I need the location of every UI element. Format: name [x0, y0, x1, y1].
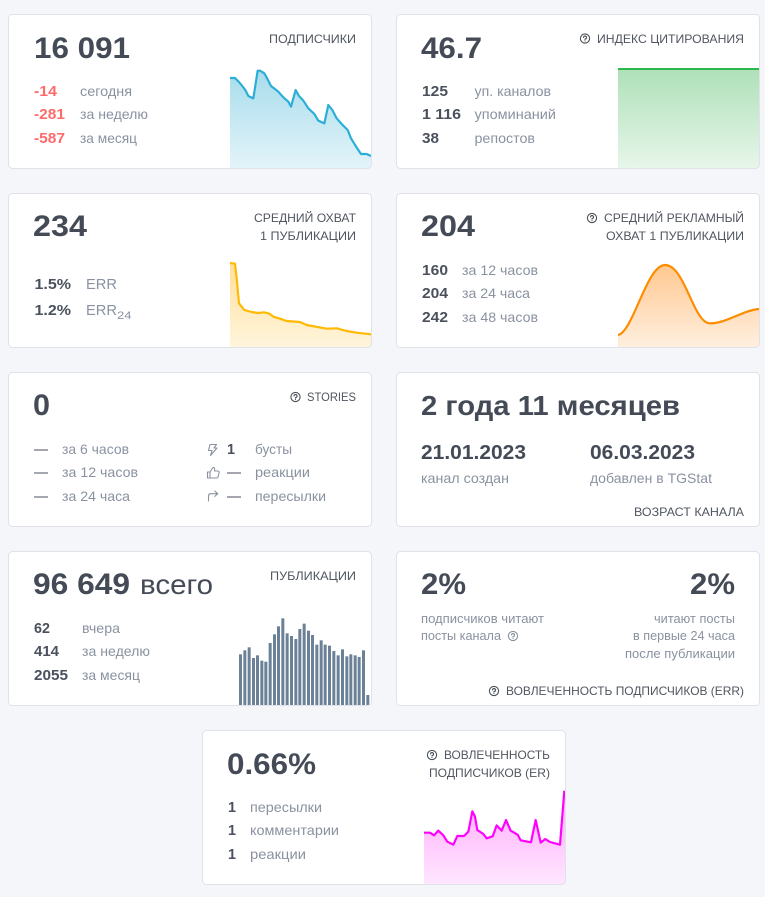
- added date: добавлен в TGStat: [590, 470, 712, 486]
- publications stats list: вчера: [82, 620, 120, 636]
- panel: stories: [8, 372, 372, 526]
- panel: subscriber engagement ER: [202, 730, 566, 884]
- ad reach stats list: за 24 часа: [462, 285, 530, 301]
- ad reach stats list: за 12 часов: [462, 262, 538, 278]
- big text: channel age: 2 года 11 месяцев: [421, 390, 680, 421]
- ERR stats list: 1.2%: [34, 303, 71, 319]
- big number: publications: 96 649: [33, 568, 130, 601]
- heading: channel age: ВОЗРАСТ КАНАЛА: [634, 505, 744, 519]
- stories time list: за 12 часов: [62, 464, 138, 480]
- heading: ER: ВОВЛЕЧЕННОСТЬ: [444, 748, 550, 762]
- stories time list: —: [34, 489, 48, 505]
- ER stats list: 1: [228, 823, 236, 839]
- big number: ER: 0.66%: [227, 748, 316, 781]
- panel: average ad reach: [396, 194, 760, 348]
- right metric: [625, 568, 735, 661]
- ER stats list: 1: [228, 847, 236, 863]
- icon: forwards: [208, 491, 218, 501]
- publications stats list: 2055: [34, 668, 68, 684]
- bar chart: publications: [239, 618, 369, 705]
- creation date: [421, 442, 526, 486]
- heading: average ad reach: ОХВАТ 1 ПУБЛИКАЦИИ: [606, 229, 744, 243]
- stories time list: за 24 часа: [62, 488, 130, 504]
- creation date: 21.01.2023: [421, 442, 526, 464]
- heading: average ad reach: СРЕДНИЙ РЕКЛАМНЫЙ: [604, 210, 744, 225]
- big number: publications: [33, 568, 213, 601]
- icon: reactions: [208, 467, 219, 478]
- subscriber changes list: [34, 83, 148, 147]
- ERR stats list: 1.5%: [34, 277, 71, 293]
- stories interaction list: бусты: [255, 441, 292, 457]
- heading: average reach: 1 ПУБЛИКАЦИИ: [260, 229, 356, 243]
- area chart: ad reach: [618, 265, 759, 347]
- icon: help: [427, 750, 437, 760]
- stories interaction list: [227, 441, 326, 505]
- ERR stats list: ERR: [86, 276, 117, 293]
- subscriber changes list: сегодня: [80, 83, 132, 99]
- big number: citation index: 46.7: [421, 32, 482, 65]
- citation stats list: репостов: [474, 130, 535, 146]
- big number: subscribers: 16 091: [34, 32, 130, 65]
- left metric: подписчиков читают: [421, 612, 544, 626]
- panel: average reach: [8, 194, 372, 348]
- citation stats list: [422, 83, 556, 147]
- publications stats list: за неделю: [82, 643, 150, 659]
- added date: [590, 442, 712, 486]
- ad reach stats list: за 48 часов: [462, 309, 538, 325]
- subscriber changes list: -587: [34, 131, 65, 147]
- stories interaction list: 1: [227, 442, 235, 458]
- ER stats list: пересылки: [250, 799, 322, 815]
- citation stats list: 38: [422, 131, 439, 147]
- creation date: канал создан: [421, 470, 509, 486]
- icon: help: [580, 34, 590, 43]
- stories interaction list: —: [227, 465, 241, 481]
- stories interaction list: реакции: [255, 464, 310, 480]
- icon: help: [489, 686, 499, 696]
- heading: ER: [429, 748, 550, 780]
- heading: subscribers: ПОДПИСЧИКИ: [269, 32, 356, 46]
- left metric: 2%: [421, 568, 466, 601]
- publications stats list: за месяц: [82, 667, 140, 683]
- big number: publications: всего: [140, 569, 213, 600]
- ad reach stats list: 160: [422, 263, 448, 279]
- publications stats list: [34, 620, 150, 684]
- citation stats list: упоминаний: [474, 106, 556, 122]
- citation stats list: 1 116: [422, 107, 461, 123]
- stories time list: —: [34, 465, 48, 481]
- icon: help: [587, 213, 597, 223]
- left metric: посты канала: [421, 629, 501, 643]
- heading: average reach: [254, 210, 357, 243]
- panel: subscribers: [8, 14, 372, 168]
- right metric: 2%: [690, 568, 735, 601]
- stories interaction list: —: [227, 489, 241, 505]
- right metric: в первые 24 часа: [633, 629, 735, 643]
- stories time list: за 6 часов: [62, 441, 129, 457]
- stories interaction list: пересылки: [255, 488, 326, 504]
- heading: citation index: ИНДЕКС ЦИТИРОВАНИЯ: [597, 32, 744, 46]
- stories time list: [34, 441, 138, 505]
- subscriber changes list: за месяц: [80, 130, 137, 146]
- big number: stories: 0: [33, 389, 50, 422]
- heading: stories: STORIES: [307, 390, 356, 404]
- ad reach stats list: [422, 262, 538, 326]
- panel: citation index: [396, 14, 760, 168]
- ER stats list: 1: [228, 800, 236, 816]
- area chart: citation index: [618, 68, 759, 168]
- subscriber changes list: -281: [34, 107, 65, 123]
- publications stats list: 62: [34, 621, 50, 637]
- panel: publications: [8, 552, 372, 706]
- area chart: average reach: [230, 263, 371, 347]
- area chart: ER: [424, 791, 565, 884]
- ER stats list: реакции: [250, 846, 306, 862]
- ad reach stats list: 242: [422, 310, 448, 326]
- big number: average ad reach: 204: [421, 210, 475, 243]
- area chart: subscribers: [230, 71, 371, 168]
- heading: ER: ПОДПИСЧИКОВ (ER): [429, 766, 550, 780]
- ER stats list: комментарии: [250, 822, 339, 838]
- right metric: читают посты: [654, 612, 735, 626]
- icon: boost: [208, 444, 217, 456]
- heading: publications: ПУБЛИКАЦИИ: [270, 569, 356, 583]
- stories time list: —: [34, 442, 48, 458]
- ERR stats list: [34, 276, 132, 322]
- panel: channel age: [396, 372, 760, 526]
- panel: subscriber engagement ERR: [396, 552, 760, 706]
- heading: average reach: СРЕДНИЙ ОХВАТ: [254, 210, 357, 225]
- subscriber changes list: за неделю: [80, 106, 148, 122]
- citation stats list: 125: [422, 84, 448, 100]
- big number: average reach: 234: [33, 210, 87, 243]
- ER stats list: [228, 799, 339, 863]
- ERR stats list: 24: [117, 310, 132, 322]
- ad reach stats list: 204: [422, 286, 448, 302]
- left metric: [421, 568, 544, 643]
- heading: average ad reach: [604, 210, 744, 243]
- heading: subscriber engagement ERR: ВОВЛЕЧЕННОСТЬ ПОДПИСЧИКОВ (ERR): [506, 684, 744, 698]
- right metric: после публикации: [625, 647, 735, 661]
- ERR stats list: ERR: [86, 302, 117, 319]
- icon: help: [291, 392, 300, 402]
- publications stats list: 414: [34, 644, 59, 660]
- citation stats list: уп. каналов: [474, 83, 551, 99]
- added date: 06.03.2023: [590, 442, 695, 464]
- subscriber changes list: -14: [34, 84, 57, 100]
